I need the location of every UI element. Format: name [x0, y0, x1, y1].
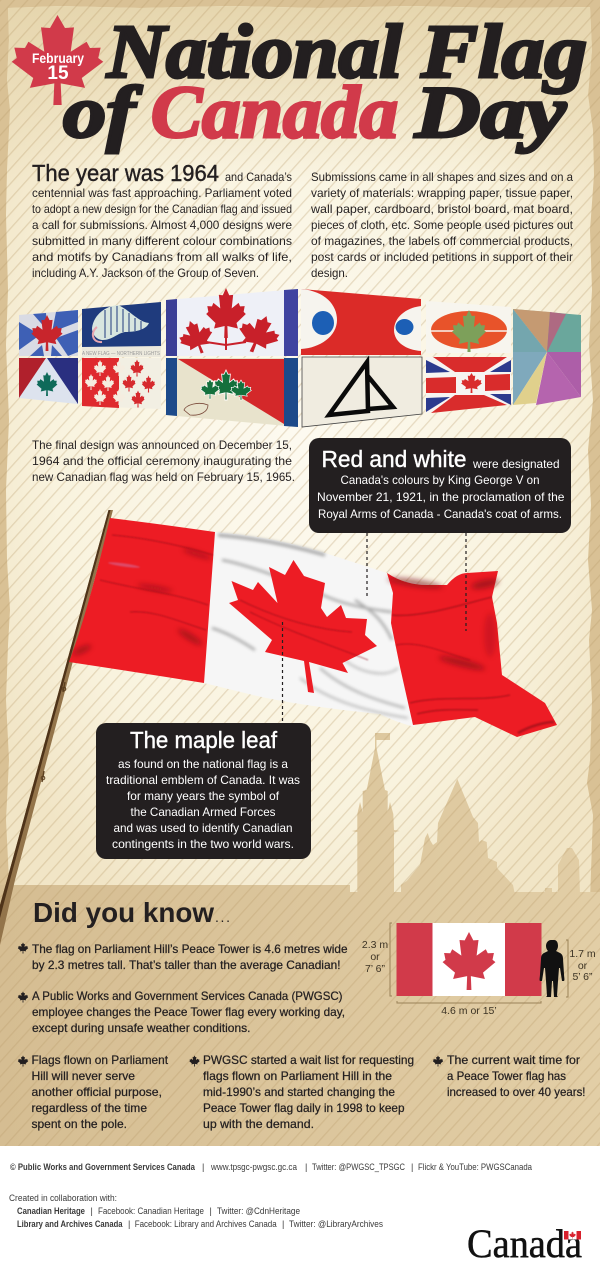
- text block: the year was 1964: centennial was fast approaching. Parliament voted: [32, 186, 292, 200]
- flag design 4: [301, 289, 421, 355]
- diagram: labels: or: [578, 960, 588, 972]
- callout: the maple leaf: traditional emblem of Canada. It was: [106, 773, 300, 787]
- Parliament Hill silhouette: [352, 733, 580, 895]
- text block: submissions: post cards or included petitions in support of their: [311, 250, 573, 264]
- text block: the year was 1964: The year was 1964: [32, 160, 219, 186]
- dashed callout lines: [282, 533, 466, 723]
- title: of: [63, 72, 142, 154]
- text block: the year was 1964: and motifs by Canadians from all walks of life,: [32, 250, 292, 264]
- text block: the year was 1964: a call for submissions. Almost 4,000 designs were: [32, 218, 292, 232]
- text block: the year was 1964: [32, 160, 292, 280]
- footer: PWGSC contact line: |: [305, 1162, 307, 1172]
- flag design 6: [513, 309, 581, 405]
- callout: the maple leaf: contingents in the two world wars.: [112, 837, 294, 851]
- footer: collaboration credits: Twitter: @CdnHeritage: [217, 1206, 300, 1216]
- footer: collaboration credits: |: [210, 1206, 212, 1216]
- flag: white centre: [204, 532, 415, 727]
- text block: submissions: design.: [311, 266, 348, 280]
- fact: flags never serve again: [18, 1053, 169, 1131]
- lower tan band: [0, 885, 600, 1146]
- fact: flag size: The flag on Parliament Hill’s Peace Tower is 4.6 metres wide: [32, 942, 348, 956]
- diagram: labels: 4.6 m or 15’: [441, 1005, 497, 1017]
- silhouette: Centre Block: [401, 779, 515, 895]
- heading: did you know: Did you know: [33, 897, 214, 928]
- fact: flags never serve again: Hill will never serve: [32, 1069, 135, 1083]
- fact: current wait time: a Peace Tower flag has: [447, 1069, 566, 1083]
- fact: current wait time: [433, 1053, 586, 1099]
- footer: PWGSC contact line: |: [411, 1162, 413, 1172]
- callout: the maple leaf: for many years the symbol of: [127, 789, 280, 803]
- fact: flags never serve again: regardless of the time: [32, 1101, 147, 1115]
- diagram: person silhouette: [540, 940, 564, 997]
- flag design 10: [302, 357, 422, 427]
- silhouette: Peace Tower: [352, 733, 400, 895]
- diagram: labels: [362, 939, 596, 1017]
- flag design 5: [426, 301, 511, 353]
- text block: final design: The final design was announced on December 15,: [32, 438, 292, 452]
- diagram: labels: or: [370, 951, 380, 963]
- text block: submissions: Submissions came in all shapes and sizes and on a: [311, 170, 573, 184]
- flag: soft fold shadows: [72, 547, 500, 672]
- diagram: dimension brackets: [390, 923, 568, 1003]
- footer: collaboration credits: |: [90, 1206, 93, 1216]
- footer: PWGSC contact line: www.tpsgc-pwgsc.gc.ca: [210, 1162, 297, 1172]
- flag: left red band: [69, 518, 215, 683]
- flag: white band folds: [212, 535, 408, 718]
- silhouette: Library tower: [545, 848, 580, 895]
- flag design 9: [166, 358, 298, 427]
- text block: submissions: of magazines, the labels off commercial products,: [311, 234, 573, 248]
- flag: thin fold lines: [100, 535, 554, 733]
- title: Flag: [420, 10, 587, 94]
- footer: collaboration credits: Facebook: Library and Archives Canada: [135, 1219, 277, 1229]
- callout: red and white: November 21, 1921, in the proclamation of the: [317, 490, 565, 504]
- callout: the maple leaf: The maple leaf: [130, 727, 278, 753]
- diagram: flag: [396, 923, 542, 996]
- fact: daily change: employee changes the Peace Tower flag every working day,: [32, 1005, 345, 1019]
- diagram: labels: 7’ 6”: [365, 963, 386, 975]
- footer: PWGSC contact line: [10, 1162, 532, 1172]
- callout: red and white: Canada's colours by King George V on: [340, 473, 540, 487]
- fact: wait list: PWGSC started a wait list for requesting: [203, 1053, 414, 1067]
- text block: final design: new Canadian flag was held on February 15, 1965.: [32, 470, 295, 484]
- text block: submissions: pieces of cloth, etc. Some people used pictures out: [311, 218, 574, 232]
- fact: flag size: [18, 942, 348, 972]
- fact: wait list: up with the demand.: [203, 1117, 314, 1131]
- fact: daily change: except during unsafe weather conditions.: [32, 1021, 250, 1035]
- fact: wait list: [189, 1053, 414, 1131]
- callout: the maple leaf: [96, 723, 311, 859]
- callout: red and white: Royal Arms of Canada - Canada's coat of arms.: [318, 507, 562, 521]
- fact: daily change: [18, 989, 345, 1035]
- footer: collaboration credits: |: [282, 1219, 284, 1229]
- footer: PWGSC contact line: Twitter: @PWGSC_TPSGC: [312, 1162, 405, 1172]
- flag: maple leaf: [229, 560, 377, 693]
- title: National: [106, 10, 402, 94]
- callout: red and white: Red and white: [322, 446, 466, 472]
- diagram: labels: 2.3 m: [362, 939, 388, 951]
- fact: wait list: mid-1990’s and started changing the: [203, 1085, 395, 1099]
- footer band: [0, 1146, 600, 1273]
- text block: the year was 1964: submitted in many different colour combinations: [32, 234, 292, 248]
- text block: final design: 1964 and the official ceremony inaugurating the: [32, 454, 292, 468]
- text block: submissions: [310, 170, 574, 280]
- text block: submissions: wall paper, cardboard, bristol board, mat board,: [310, 202, 573, 216]
- Canada wordmark: Canada: [467, 1221, 582, 1266]
- footer: collaboration credits: Canadian Heritage: [17, 1206, 85, 1216]
- fact: current wait time: The current wait time for: [447, 1053, 580, 1067]
- footer: PWGSC contact line: Flickr & YouTube: PWGSCanada: [418, 1162, 532, 1172]
- callout: the maple leaf: the Canadian Armed Forces: [130, 805, 276, 819]
- footer: PWGSC contact line: |: [202, 1162, 204, 1172]
- fact: flags never serve again: spent on the pole.: [32, 1117, 127, 1131]
- footer: collaboration credits: Twitter: @LibraryArchives: [289, 1219, 383, 1229]
- flag size diagram: [362, 923, 596, 1017]
- icon: maple leaf date badge: February: [32, 51, 84, 66]
- text block: submissions: variety of materials: wrapping paper, tissue paper,: [311, 186, 573, 200]
- text block: the year was 1964: including A.Y. Jackson of the Group of Seven.: [32, 266, 259, 280]
- flag: pink highlight: [108, 561, 140, 569]
- flag: right red band: [387, 571, 557, 737]
- icon: maple leaf date badge: [12, 15, 103, 105]
- flag design 2: [82, 302, 161, 357]
- footer: collaboration credits: [9, 1193, 383, 1229]
- fact: daily change: A Public Works and Government Services Canada (PWGSC): [32, 989, 342, 1003]
- fact: flags never serve again: another official purpose,: [32, 1085, 162, 1099]
- title: Day: [414, 72, 567, 154]
- flag design 3: [166, 288, 298, 358]
- fact: flags never serve again: Flags flown on Parliament: [32, 1053, 169, 1067]
- callout: red and white: were designated: [472, 457, 560, 471]
- flag design 7: [19, 358, 78, 404]
- fact: wait list: Peace Tower flag daily in 1998 to keep: [203, 1101, 405, 1115]
- flag design 2: A NEW FLAG — NORTHERN LIGHTS: [82, 351, 161, 357]
- diagram: labels: 5’ 6”: [572, 971, 593, 983]
- footer: collaboration credits: Created in collaboration with:: [9, 1193, 117, 1203]
- flag pole: [0, 510, 113, 945]
- flag design 11: [426, 357, 511, 413]
- fact: wait list: flags flown on Parliament Hill in the: [203, 1069, 392, 1083]
- text block: the year was 1964: to adopt a new design for the Canadian flag and issued: [32, 202, 292, 216]
- flag design 1: [19, 310, 78, 356]
- text block: the year was 1964: and Canada’s: [225, 170, 292, 184]
- flag design 8: [82, 358, 161, 409]
- callout: the maple leaf: as found on the national flag is a: [118, 757, 288, 771]
- footer: collaboration credits: |: [128, 1219, 130, 1229]
- footer: PWGSC contact line: © Public Works and Government Services Canada: [10, 1162, 196, 1172]
- fact: flag size: by 2.3 metres tall. That’s taller than the average Canadian!: [32, 958, 340, 972]
- flag designs collage: [19, 288, 581, 427]
- diagram: labels: 1.7 m: [569, 948, 596, 960]
- callout: red and white: [309, 438, 571, 533]
- footer: collaboration credits: Library and Archives Canada: [17, 1219, 123, 1229]
- callout: the maple leaf: and was used to identify Canadian: [114, 821, 292, 835]
- fact: current wait time: increased to over 40 years!: [447, 1085, 586, 1099]
- heading: did you know: ...: [215, 909, 230, 925]
- footer: collaboration credits: Facebook: Canadian Heritage: [98, 1206, 204, 1216]
- title: Canada: [151, 72, 398, 154]
- text block: final design: [32, 438, 295, 484]
- title: [63, 10, 587, 154]
- waving Canadian flag: [69, 518, 557, 737]
- icon: maple leaf date badge: 15: [47, 63, 69, 84]
